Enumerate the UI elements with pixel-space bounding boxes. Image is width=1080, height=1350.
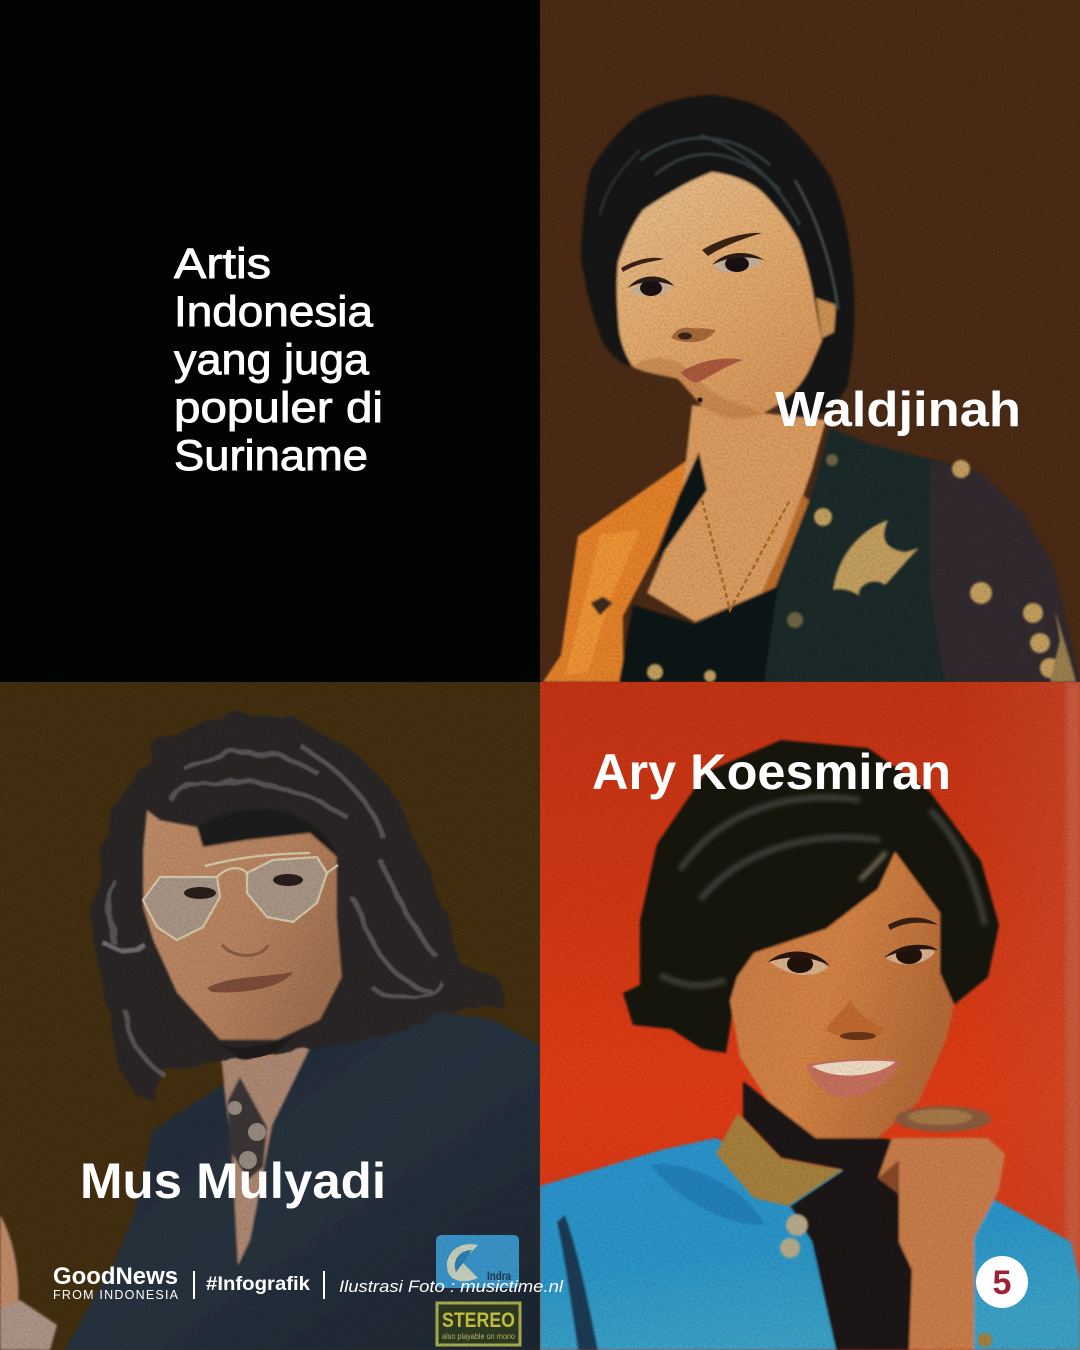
grain texture xyxy=(540,0,1080,682)
icon: aviator glasses xyxy=(143,853,338,940)
panel: Ary Koesmiran portrait xyxy=(540,682,1080,1350)
icon: nose, lips and goatee xyxy=(207,945,293,1058)
title: yang juga xyxy=(174,336,369,384)
icon: record label logo: also playable on mono xyxy=(442,1332,515,1341)
icon: hair strands xyxy=(105,745,445,1075)
icon: eyes behind glasses xyxy=(184,874,303,899)
name label: Ary Koesmiran: Ary Koesmiran xyxy=(592,744,951,800)
title: Indonesia xyxy=(174,288,373,336)
footer brand logo xyxy=(53,1263,179,1302)
footer photo credit: Ilustrasi Foto : musictime.nl xyxy=(339,1277,564,1296)
icon: record label logo xyxy=(436,1235,520,1345)
panel: Waldjinah portrait xyxy=(540,0,1080,682)
icon: hair highlights Waldjinah xyxy=(600,135,838,310)
footer brand logo: GoodNews xyxy=(53,1263,178,1290)
icon: tie pattern xyxy=(228,1101,266,1169)
icon: record label logo: STEREO xyxy=(442,1309,515,1332)
title: Suriname xyxy=(174,432,368,480)
icon: record label logo: Indra xyxy=(487,1269,511,1283)
name label: Mus Mulyadi: Mus Mulyadi xyxy=(80,1153,386,1209)
title: populer di xyxy=(174,384,383,432)
footer hashtag: #Infografik xyxy=(206,1274,310,1295)
icon: long wavy hair xyxy=(90,713,503,1100)
footer brand logo: FROM INDONESIA xyxy=(53,1288,179,1302)
icon: hair sheen xyxy=(660,798,985,985)
page number badge xyxy=(976,1256,1028,1308)
icon: Waldjinah facial features xyxy=(621,233,790,610)
icon: kebaya gold ornaments xyxy=(591,454,1076,682)
panel: title background xyxy=(0,0,540,682)
icon: gold necklace, brooch and ring xyxy=(716,1106,992,1347)
title xyxy=(174,240,383,480)
icon: Ary Koesmiran facial features xyxy=(768,918,938,1097)
panel: Mus Mulyadi portrait xyxy=(0,682,540,1350)
title: Artis xyxy=(174,240,271,288)
page number badge: 5 xyxy=(993,1264,1011,1302)
name label: Waldjinah: Waldjinah xyxy=(775,383,1021,437)
